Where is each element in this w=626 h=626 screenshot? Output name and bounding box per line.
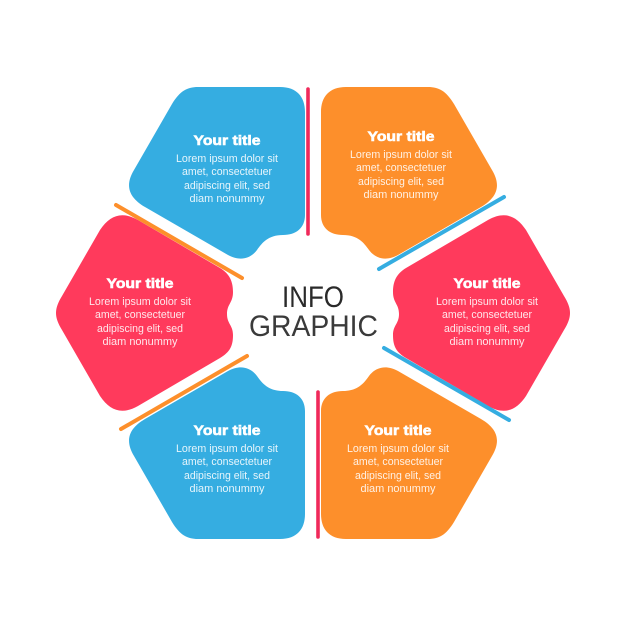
panel: bottom-left blue: diam nonummy xyxy=(190,483,265,495)
panel: top-left blue: diam nonummy xyxy=(190,193,265,205)
panel: right red xyxy=(393,215,570,411)
separator: lower-right blue line xyxy=(384,348,509,420)
panel: top-left blue xyxy=(129,87,305,259)
panel: bottom-left blue: amet, consectetuer xyxy=(182,456,272,468)
panel: left red: adipiscing elit, sed xyxy=(97,323,183,335)
panel: top-right orange: adipiscing elit, sed xyxy=(358,176,444,188)
panel: top-right orange: Your title xyxy=(368,128,435,144)
panel: top-right orange: amet, consectetuer xyxy=(356,162,446,174)
panel: top-left blue: amet, consectetuer xyxy=(182,166,272,178)
panel: bottom-right orange: amet, consectetuer xyxy=(353,456,443,468)
separator: lower-left orange line xyxy=(121,356,247,429)
panel: bottom-right orange: Your title xyxy=(364,422,432,438)
panel: top-right orange: Lorem ipsum dolor sit xyxy=(350,149,452,161)
panel: bottom-left blue: Your title xyxy=(194,422,261,438)
panel: top-right orange: diam nonummy xyxy=(364,189,439,201)
panel: top-left blue: Lorem ipsum dolor sit xyxy=(176,153,278,165)
panel: left red: amet, consectetuer xyxy=(95,309,185,321)
panel: right red: Your title xyxy=(454,275,521,291)
panel: top-right orange xyxy=(321,87,497,259)
separator: bottom pink line xyxy=(316,392,320,537)
center title: GRAPHIC xyxy=(249,310,378,343)
separator: upper-right blue line xyxy=(379,197,504,269)
panel: bottom-right orange: adipiscing elit, sed xyxy=(355,470,441,482)
panel: bottom-left blue xyxy=(129,367,305,539)
center title: INFO xyxy=(282,281,344,314)
panel: right red: amet, consectetuer xyxy=(442,309,532,321)
panel: bottom-left blue: Lorem ipsum dolor sit xyxy=(176,443,278,455)
panel: right red: diam nonummy xyxy=(450,336,525,348)
panel: bottom-right orange xyxy=(321,367,497,539)
panel: left red xyxy=(56,215,233,411)
panel: top-left blue: adipiscing elit, sed xyxy=(184,180,270,192)
panel: left red: diam nonummy xyxy=(102,336,178,348)
panel: right red: adipiscing elit, sed xyxy=(444,323,530,335)
panel: bottom-right orange: Lorem ipsum dolor sit xyxy=(347,443,449,455)
panel: bottom-right orange: diam nonummy xyxy=(360,483,436,495)
panel: left red: Your title xyxy=(106,275,174,291)
separator: top pink line xyxy=(306,89,310,234)
panel: right red: Lorem ipsum dolor sit xyxy=(436,296,538,308)
panel: bottom-left blue: adipiscing elit, sed xyxy=(184,470,270,482)
center title xyxy=(249,281,378,343)
separator: upper-left orange line xyxy=(116,205,242,278)
panel: top-left blue: Your title xyxy=(194,132,261,148)
panel: left red: Lorem ipsum dolor sit xyxy=(89,296,191,308)
